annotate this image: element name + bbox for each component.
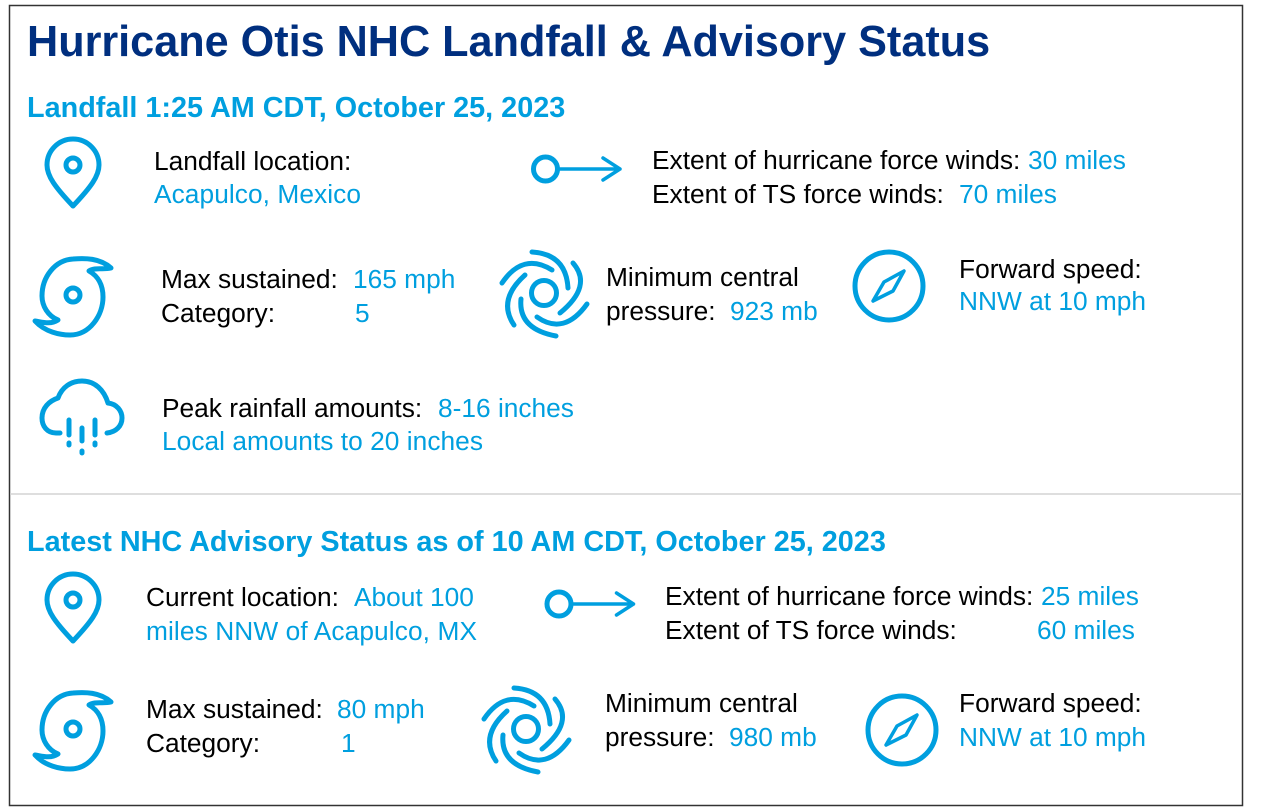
text: landfall max sustained winds: 5 <box>355 298 370 328</box>
text: advisory minimum central pressure: pressure: <box>605 722 715 752</box>
text: landfall wind extent: 70 miles <box>959 179 1057 209</box>
text: landfall forward speed: NNW at 10 mph <box>959 286 1146 316</box>
text: peak rainfall: Peak rainfall amounts: <box>162 393 422 423</box>
text: advisory forward speed <box>959 688 1146 752</box>
text: landfall location <box>154 146 361 209</box>
text: current location: About 100 <box>354 582 474 612</box>
heading: latest advisory: Latest NHC Advisory Status as of 10 AM CDT, October 25, 2023 <box>27 526 886 558</box>
icon: advisory compass <box>868 696 936 764</box>
text: advisory minimum central pressure: 980 mb <box>729 722 817 752</box>
icon: advisory pressure spiral <box>484 688 569 772</box>
icon: advisory hurricane symbol <box>35 693 111 769</box>
icon: compass <box>855 252 923 320</box>
text: advisory forward speed: NNW at 10 mph <box>959 722 1146 752</box>
text: advisory max sustained winds: 80 mph <box>337 694 425 724</box>
text: landfall minimum central pressure <box>606 262 818 326</box>
text: landfall location: Acapulco, Mexico <box>154 179 361 209</box>
icon: landfall location pin <box>47 139 99 206</box>
text: landfall max sustained winds: 165 mph <box>353 264 455 294</box>
text: landfall max sustained winds <box>161 264 455 328</box>
text: advisory minimum central pressure <box>605 688 817 752</box>
text: advisory max sustained winds: 1 <box>341 728 356 758</box>
text: landfall wind extent: Extent of TS force winds: <box>652 179 944 209</box>
icon: pressure spiral <box>502 252 587 336</box>
text: advisory forward speed: Forward speed: <box>959 688 1142 718</box>
text: peak rainfall: 8-16 inches <box>438 393 574 423</box>
text: advisory minimum central pressure: Minimum central <box>605 688 798 718</box>
title: Hurricane Otis NHC Landfall & Advisory Status <box>27 18 990 66</box>
icon: hurricane symbol <box>35 259 111 335</box>
text: advisory max sustained winds: Category: <box>146 728 260 758</box>
icon: current location pin <box>47 574 99 641</box>
icon: wind extent arrow <box>534 157 620 181</box>
text: current location <box>146 582 477 646</box>
text: landfall wind extent: 30 miles <box>1028 145 1126 175</box>
text: advisory max sustained winds: Max sustained: <box>146 694 323 724</box>
text: advisory wind extent <box>665 581 1139 645</box>
text: peak rainfall <box>162 393 574 456</box>
text: landfall minimum central pressure: 923 mb <box>730 296 818 326</box>
text: landfall max sustained winds: Max sustained: <box>161 264 338 294</box>
text: advisory wind extent: Extent of hurricane force winds: <box>665 581 1033 611</box>
text: landfall forward speed: Forward speed: <box>959 254 1142 284</box>
text: landfall max sustained winds: Category: <box>161 298 275 328</box>
text: current location: Current location: <box>146 582 339 612</box>
text: landfall wind extent: Extent of hurricane force winds: <box>652 145 1020 175</box>
text: landfall minimum central pressure: Minimum central <box>606 262 799 292</box>
text: landfall location: Landfall location: <box>154 146 351 176</box>
heading: landfall: Landfall 1:25 AM CDT, October 25, 2023 <box>27 92 565 124</box>
text: advisory wind extent: Extent of TS force winds: <box>665 615 957 645</box>
icon: advisory wind extent arrow <box>547 592 634 616</box>
text: landfall forward speed <box>959 254 1146 316</box>
text: landfall minimum central pressure: pressure: <box>606 296 716 326</box>
text: peak rainfall: Local amounts to 20 inches <box>162 426 483 456</box>
text: current location: miles NNW of Acapulco, MX <box>146 616 477 646</box>
text: advisory max sustained winds <box>146 694 425 758</box>
text: advisory wind extent: 25 miles <box>1041 581 1139 611</box>
text: advisory wind extent: 60 miles <box>1037 615 1135 645</box>
text: landfall wind extent <box>652 145 1126 209</box>
icon: rain cloud <box>42 381 122 453</box>
